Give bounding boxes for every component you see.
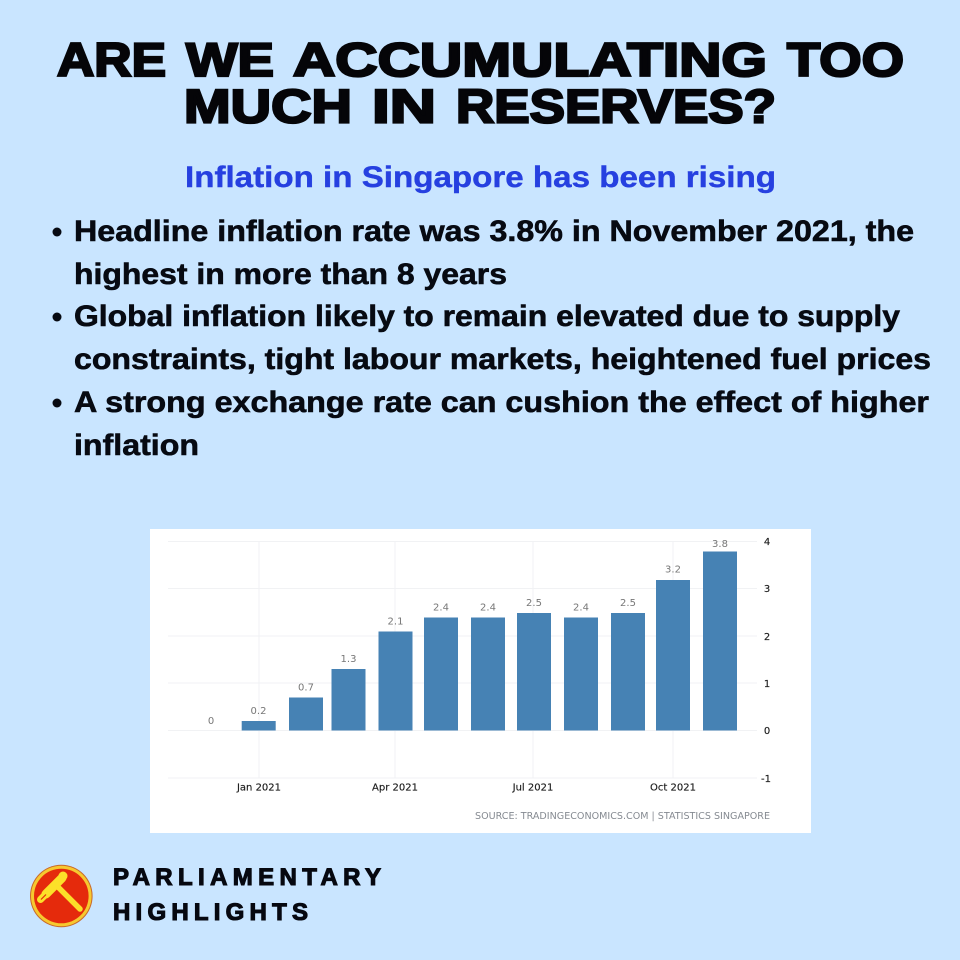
footer label: HIGHLIGHTS bbox=[113, 899, 308, 926]
value labels: 3.8 bbox=[712, 539, 728, 550]
value labels: 0 bbox=[208, 716, 214, 727]
value labels: 2.1 bbox=[388, 616, 403, 628]
bullet 2: constraints, tight labour markets, heightened fuel prices bbox=[74, 343, 931, 376]
value labels: 2.4 bbox=[573, 602, 589, 614]
footer label: PARLIAMENTARY bbox=[113, 864, 381, 891]
icon: red circle with yellow hammer logo bbox=[30, 865, 93, 927]
title: WE bbox=[186, 33, 274, 86]
chart source: SOURCE: TRADINGECONOMICS.COM | STATISTICS SINGAPORE bbox=[475, 811, 770, 822]
value labels: 3.2 bbox=[665, 564, 681, 576]
y axis labels: 4 bbox=[764, 537, 770, 548]
x axis labels: Oct 2021 bbox=[650, 782, 696, 794]
bullet 1: Headline inflation rate was 3.8% in November 2021, the bbox=[74, 215, 914, 248]
x axis labels: Jan 2021 bbox=[236, 782, 281, 794]
title bbox=[57, 33, 904, 132]
bars bbox=[242, 552, 737, 730]
y axis labels: 3 bbox=[764, 584, 770, 595]
x axis labels: Apr 2021 bbox=[372, 782, 418, 794]
y axis labels bbox=[761, 537, 771, 785]
title: TOO bbox=[787, 33, 904, 86]
y axis labels: 1 bbox=[764, 679, 770, 690]
value labels: 2.4 bbox=[480, 602, 496, 614]
title: MUCH bbox=[184, 80, 352, 132]
bullet list bbox=[52, 215, 931, 462]
value labels: 2.5 bbox=[526, 598, 542, 609]
value labels: 0.7 bbox=[298, 682, 314, 694]
bullet 3: inflation bbox=[74, 429, 199, 462]
bullet 3: A strong exchange rate can cushion the effect of higher bbox=[74, 386, 929, 419]
title: ACCUMULATING bbox=[293, 33, 767, 86]
bullet 2 bbox=[52, 300, 931, 376]
bullet 1: highest in more than 8 years bbox=[74, 258, 507, 291]
value labels: 1.3 bbox=[341, 654, 356, 665]
x axis labels: Jul 2021 bbox=[512, 782, 553, 794]
title: RESERVES? bbox=[456, 80, 776, 132]
footer label bbox=[113, 864, 381, 926]
value labels: 2.5 bbox=[620, 598, 636, 609]
bullet 1 bbox=[52, 215, 914, 291]
bullet 2: Global inflation likely to remain elevated due to supply bbox=[74, 300, 900, 333]
value labels: 0.2 bbox=[251, 706, 266, 717]
bar chart bbox=[150, 529, 811, 833]
y axis labels: 2 bbox=[764, 632, 770, 643]
value labels: 2.4 bbox=[433, 602, 449, 614]
y axis labels: -1 bbox=[761, 774, 771, 785]
value labels bbox=[208, 539, 728, 727]
title: IN bbox=[372, 80, 436, 132]
title: ARE bbox=[57, 33, 166, 86]
subtitle: Inflation in Singapore has been rising bbox=[185, 161, 776, 194]
y axis labels: 0 bbox=[764, 726, 770, 737]
bullet 3 bbox=[52, 386, 929, 462]
x axis labels bbox=[236, 782, 696, 794]
